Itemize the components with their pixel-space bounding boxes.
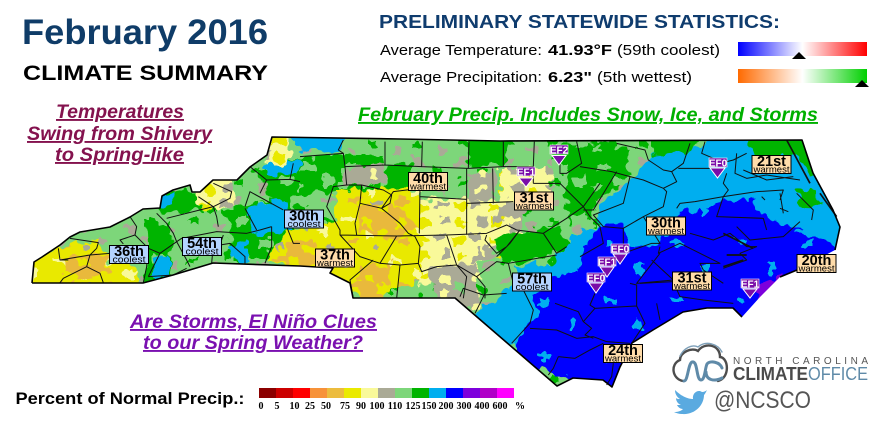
rank label: 30th coolest bbox=[284, 208, 324, 230]
rank label: 57th coolest: 57th bbox=[517, 272, 547, 288]
legend colour scale: % bbox=[515, 401, 525, 412]
temperature scale bar bbox=[738, 42, 867, 59]
rank label: 24th warmest: 24th bbox=[608, 343, 638, 359]
tornado marker: EF2 north bbox=[550, 145, 569, 165]
rank label: 20th warmest: warmest bbox=[797, 264, 835, 274]
rank label: 54th coolest: 54th bbox=[187, 236, 217, 252]
rank label: 31st warmest bbox=[514, 190, 554, 212]
legend colour scale: 0 bbox=[258, 401, 264, 412]
rank label: 36th coolest: coolest bbox=[112, 254, 146, 266]
icon: cloud with NC bbox=[674, 343, 727, 381]
title: February 2016 bbox=[22, 13, 268, 52]
legend colour scale: 25 bbox=[305, 401, 315, 412]
rank label: 54th coolest bbox=[182, 236, 222, 258]
average precipitation: 6.23" bbox=[548, 70, 592, 86]
average temperature: 41.93°F bbox=[548, 43, 612, 59]
headline: storms: Are Storms, El Niño Clues bbox=[129, 312, 377, 333]
headline: precipitation: February Precip. Includes Snow, Ice, and Storms bbox=[358, 105, 818, 126]
county boundaries bbox=[58, 140, 837, 385]
office name bbox=[733, 356, 868, 384]
rank label: 24th warmest: warmest bbox=[604, 354, 641, 364]
tornado marker: EF1 southeast: EF1 bbox=[741, 280, 760, 290]
legend colour scale: 125 bbox=[406, 401, 420, 412]
tornado marker: EF0 east two: EF0 bbox=[587, 274, 606, 284]
rank label: 57th coolest bbox=[512, 272, 552, 293]
panel: preliminary statewide statistics bbox=[379, 12, 869, 87]
headline: temperatures: to Spring-like bbox=[55, 145, 184, 166]
tornado marker: EF0 east one bbox=[611, 244, 630, 264]
rank label: 31st warmest: 31st bbox=[519, 190, 549, 206]
legend colour scale: 110 bbox=[388, 401, 402, 412]
headline: temperatures bbox=[27, 102, 213, 166]
rank label: 20th warmest bbox=[797, 253, 836, 274]
rank label: 36th coolest: 36th bbox=[114, 244, 144, 260]
average temperature: Average Temperature: bbox=[380, 43, 542, 59]
legend colour scale: 5 bbox=[274, 401, 280, 412]
tornado marker: EF1 north: EF1 bbox=[517, 168, 536, 178]
rank label: 36th coolest bbox=[110, 244, 148, 266]
map: percent of normal precipitation bbox=[31, 136, 841, 388]
legend colour scale: 90 bbox=[356, 401, 366, 412]
rank label: 31st warmest east: warmest bbox=[673, 281, 710, 292]
precipitation scale bar bbox=[738, 69, 869, 87]
rank label: 21st warmest: 21st bbox=[757, 154, 786, 170]
rank label: 31st warmest east: 31st bbox=[677, 270, 707, 286]
rank label: 40th warmest bbox=[408, 171, 448, 192]
legend colour scale: 150 bbox=[422, 401, 436, 412]
tornado marker: EF1 east: EF1 bbox=[598, 258, 617, 268]
tornado marker: EF0 northeast: EF0 bbox=[709, 158, 728, 170]
rank label: 40th warmest: warmest bbox=[409, 182, 446, 192]
tornado marker: EF0 east one: EF0 bbox=[611, 244, 630, 256]
average precipitation bbox=[380, 70, 692, 86]
legend colour scale: 100 bbox=[370, 401, 384, 412]
legend colour scale: 75 bbox=[340, 401, 350, 412]
tornado marker: EF0 east two bbox=[587, 273, 606, 293]
rank label: 54th coolest: coolest bbox=[186, 246, 219, 258]
rank label: 30th coolest: coolest bbox=[288, 219, 321, 230]
average precipitation: Average Precipitation: bbox=[380, 70, 542, 86]
legend colour scale: 10 bbox=[290, 401, 300, 412]
rank label: 30th warmest: warmest bbox=[647, 226, 684, 237]
average precipitation: (5th wettest) bbox=[597, 70, 692, 86]
tornado marker: EF0 northeast bbox=[709, 158, 728, 178]
statistics heading: PRELIMINARY STATEWIDE STATISTICS: bbox=[379, 12, 780, 32]
office name: CLIMATE bbox=[733, 364, 808, 384]
headline: temperatures: Swing from Shivery bbox=[27, 124, 213, 145]
legend colour scale: 200 bbox=[438, 401, 454, 412]
office name: OFFICE bbox=[808, 364, 868, 384]
tornado marker: EF1 southeast bbox=[741, 279, 760, 298]
logo: NC Climate Office bbox=[674, 343, 868, 384]
tornado marker: EF1 north bbox=[517, 167, 536, 187]
rank label: 31st warmest: warmest bbox=[515, 201, 552, 212]
rank label: 30th warmest: 30th bbox=[651, 216, 681, 232]
rank label: 37th warmest bbox=[316, 248, 354, 269]
rank label: 30th warmest bbox=[646, 216, 686, 237]
headline: temperatures: Temperatures bbox=[56, 102, 184, 123]
icon: twitter bird bbox=[674, 390, 707, 414]
tornado marker: EF1 east bbox=[598, 257, 617, 277]
rank label: 20th warmest: 20th bbox=[802, 253, 831, 269]
average temperature: (59th coolest) bbox=[617, 43, 720, 59]
legend colour scale: 600 bbox=[492, 401, 508, 412]
rank label: 24th warmest bbox=[604, 343, 642, 364]
rank label: 57th coolest: coolest bbox=[516, 282, 549, 293]
rank label: 21st warmest: warmest bbox=[752, 164, 790, 176]
headline: storms bbox=[129, 312, 377, 354]
average temperature bbox=[380, 43, 720, 59]
legend colour scale bbox=[258, 388, 525, 412]
twitter handle: @NCSCO bbox=[714, 387, 811, 414]
state outline bbox=[32, 137, 840, 387]
tornado marker: EF2 north: EF2 bbox=[550, 146, 569, 156]
legend colour scale: 50 bbox=[321, 401, 331, 412]
rank label: 40th warmest: 40th bbox=[413, 171, 443, 187]
rank label: 37th warmest: 37th bbox=[320, 248, 350, 264]
rank label: 30th coolest: 30th bbox=[289, 208, 319, 224]
legend colour scale: 300 bbox=[456, 401, 472, 412]
rank label: 21st warmest bbox=[752, 154, 791, 176]
rank label: 37th warmest: warmest bbox=[316, 258, 353, 269]
office name: NORTH CAROLINA bbox=[733, 356, 868, 367]
headline: storms: to our Spring Weather? bbox=[143, 333, 363, 354]
legend title: Percent of Normal Precip.: bbox=[16, 389, 245, 408]
subtitle: CLIMATE SUMMARY bbox=[23, 62, 268, 85]
legend colour scale: 400 bbox=[474, 401, 490, 412]
rank label: 31st warmest east bbox=[672, 270, 712, 292]
